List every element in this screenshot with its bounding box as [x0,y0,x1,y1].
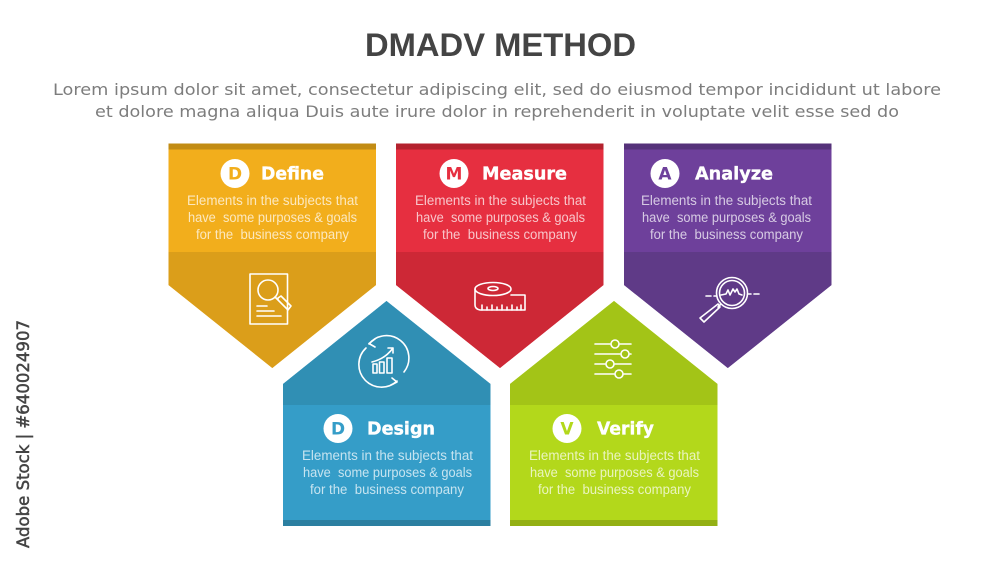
body text: design: for the business company [310,482,464,497]
icon: document with magnifier [250,274,291,324]
heading: define: Define [261,164,324,184]
icon: magnifier with chart line [700,278,759,322]
letter badge: D: D [228,164,242,184]
icon: sliders [595,340,631,378]
icon: growth chart in circular arrows [359,336,409,387]
body text: define [187,193,358,242]
letter badge: M: M [446,164,462,184]
body text: measure: Elements in the subjects that [415,193,586,208]
panel: verify [510,301,718,526]
letter badge: V: V [560,420,574,440]
heading: measure: Measure [482,164,567,184]
body text: design: have some purposes & goals [303,465,472,480]
title: DMADV METHOD [365,27,636,63]
letter badge: M [440,159,468,188]
letter badge: D: D [331,420,345,440]
body text: measure: for the business company [423,227,577,242]
body text: verify: Elements in the subjects that [529,448,700,463]
heading: verify: Verify [597,418,654,440]
body text: analyze: for the business company [650,227,803,242]
body text: define: have some purposes & goals [188,210,357,225]
body text: measure [415,193,586,242]
body text: design [302,448,473,497]
heading: design: Design [367,418,435,440]
body text: verify [529,448,700,497]
subtitle text: Lorem ipsum dolor sit amet, consectetur adipiscing elit, sed do eiusmod tempor incididunt ut labore [53,80,941,99]
heading: analyze: Analyze [695,164,773,184]
panel: design [283,301,490,526]
body text: verify: for the business company [538,482,691,497]
panel: measure [396,144,604,368]
stock id side text: Adobe Stock | #640024907 [14,320,34,548]
body text: measure: have some purposes & goals [416,210,585,225]
subtitle text [53,80,941,121]
body text: define: Elements in the subjects that [187,193,358,208]
letter badge: D [324,414,352,443]
letter badge: A [650,159,680,188]
letter badge: D [220,159,250,188]
panel: analyze [624,144,832,368]
body text: design: Elements in the subjects that [302,448,473,463]
body text: verify: have some purposes & goals [530,465,699,480]
icon: tape measure [475,282,525,310]
letter badge: A: A [658,164,672,184]
letter badge: V [552,414,582,443]
body text: define: for the business company [196,227,349,242]
body text: analyze [641,193,812,242]
subtitle text: et dolore magna aliqua Duis aute irure dolor in reprehenderit in voluptate velit esse sed do [95,102,899,121]
body text: analyze: Elements in the subjects that [641,193,812,208]
panel: define [168,144,376,368]
body text: analyze: have some purposes & goals [642,210,811,225]
